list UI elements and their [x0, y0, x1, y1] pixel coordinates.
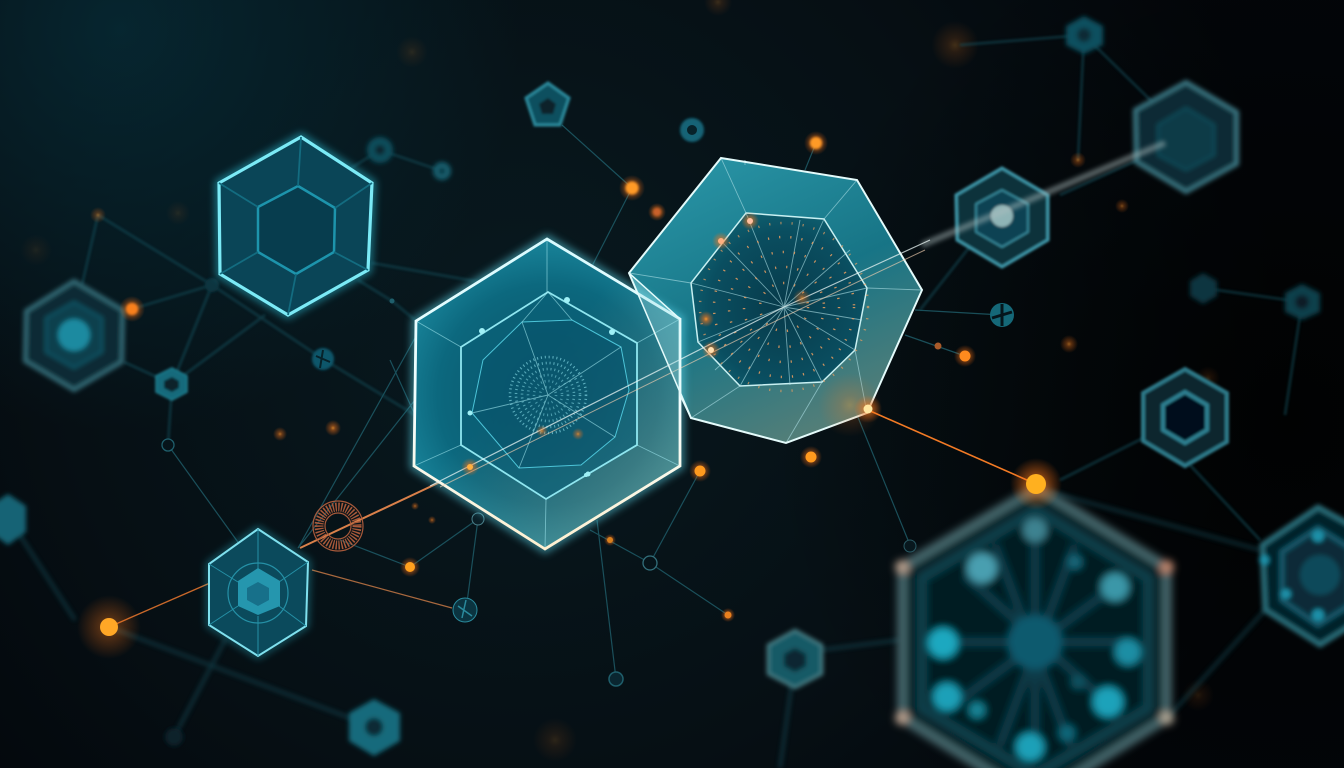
- connection lines: [168, 125, 1002, 679]
- hexagon: left blurred: [25, 281, 123, 390]
- blurred connection lines: [82, 35, 1302, 540]
- small round nodes: [162, 118, 1014, 686]
- hexagon: top right blurred: [1135, 82, 1237, 192]
- light beam through the polygons: [430, 143, 1165, 487]
- orange glowing nodes: [77, 131, 1129, 659]
- second large faceted polygon: [629, 158, 922, 443]
- orange connection lines: [109, 410, 1036, 627]
- blurred hexagon: right edge: [1259, 507, 1344, 645]
- blurred hexagon: large bottom right: [895, 488, 1174, 768]
- hexagon: lower left glowing: [209, 529, 308, 656]
- small hex node: [156, 368, 187, 400]
- overlap facet: [629, 273, 691, 418]
- dotted core sphere: [510, 357, 586, 433]
- circular orange ornament: [313, 501, 363, 551]
- main glowing hexagon: [414, 239, 680, 549]
- hexagon: upper right: [956, 168, 1048, 267]
- pentagon node: [526, 83, 569, 125]
- hexagon: right middle: [1143, 369, 1227, 466]
- hexagon: top left glowing: [219, 137, 372, 315]
